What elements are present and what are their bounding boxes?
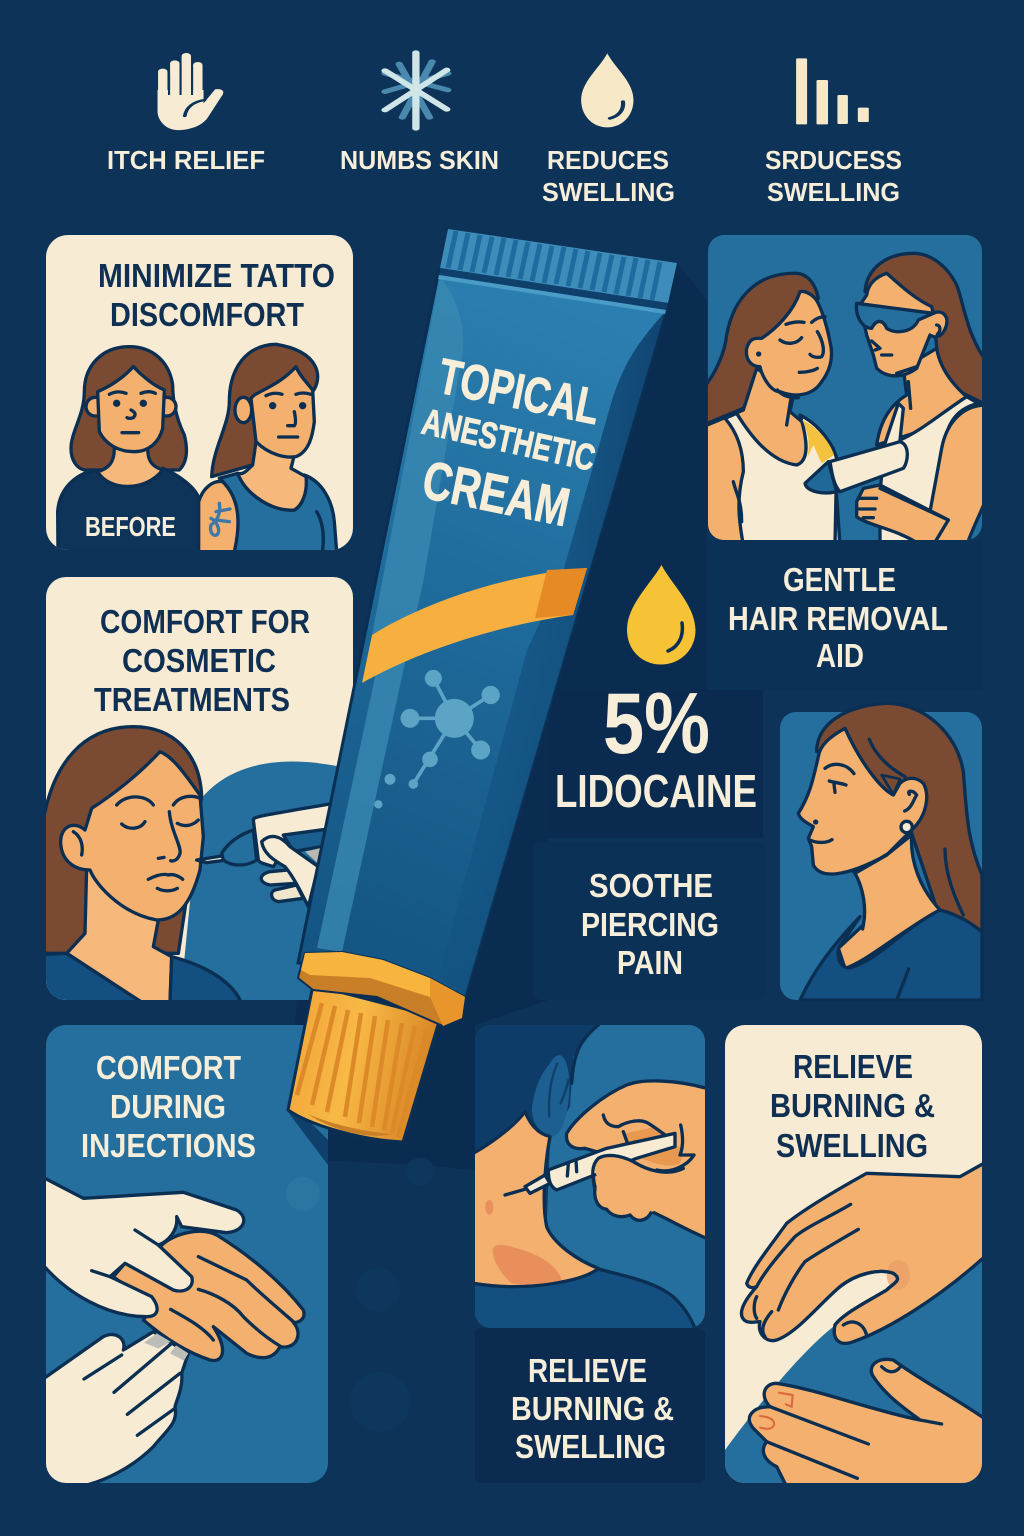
- illustration: client: [703, 273, 840, 545]
- heading: comfort during injections: [82, 1056, 255, 1158]
- text panel: relieve burning and swelling: [475, 1328, 705, 1483]
- heading: relieve burning and swelling: SWELLING: [776, 1127, 928, 1164]
- tube: topical anesthetic cream: [288, 229, 677, 1142]
- heading: comfort during injections: INJECTIONS: [81, 1127, 256, 1164]
- icon: hand: [158, 56, 223, 130]
- panel: profile woman for piercing: [780, 703, 982, 1000]
- illustration: hands: [42, 1177, 304, 1485]
- tube crimp: [438, 229, 677, 314]
- label: itch relief: ITCH RELIEF: [107, 145, 265, 175]
- text panel: relieve burning and swelling: SWELLING: [515, 1428, 666, 1465]
- heading: relieve burning and swelling: RELIEVE: [793, 1048, 913, 1085]
- heading: comfort for cosmetic treatments: COMFORT FOR: [100, 603, 310, 640]
- text panel: 5% lidocaine: [548, 676, 763, 838]
- text panel: gentle hair removal aid: HAIR REMOVAL: [728, 600, 948, 637]
- text panel: soothe piercing pain: PAIN: [617, 944, 683, 981]
- text panel: gentle hair removal aid: GENTLE: [783, 561, 896, 598]
- heading: relieve burning and swelling: BURNING &: [770, 1087, 935, 1124]
- illustration: syringe and hand: [470, 1023, 710, 1330]
- icon: snowflake: [385, 53, 448, 128]
- text panel: soothe piercing pain: PIERCING: [581, 906, 719, 943]
- injector device: [197, 856, 227, 863]
- orange cap: [288, 985, 440, 1142]
- text panel: relieve burning and swelling: BURNING &: [511, 1390, 674, 1427]
- tube shadow: [288, 263, 707, 1170]
- tube label: ANESTHETIC: [418, 401, 599, 479]
- label: srducess swelling: [765, 145, 902, 207]
- illustration: hands on arm: [725, 1162, 987, 1487]
- molecule icon: [374, 670, 500, 808]
- tube label: [418, 348, 605, 538]
- heading: minimize tattoo discomfort: [100, 264, 334, 326]
- heading: minimize tattoo discomfort: DISCOMFORT: [110, 296, 304, 333]
- label: reduces swelling: SWELLING: [542, 177, 675, 207]
- panel: relieve burning and swelling: [725, 1025, 987, 1487]
- text panel: 5% lidocaine: 5%: [603, 676, 710, 772]
- icon: water drop: [581, 53, 633, 127]
- illustration: woman before: [58, 347, 199, 552]
- icon: yellow drop: [627, 565, 696, 664]
- panel: comfort during injections: [42, 1025, 328, 1485]
- orange collar: [298, 952, 465, 1026]
- illustration: woman with tattoo: [199, 344, 337, 552]
- panel: minimize tattoo discomfort: [46, 235, 353, 552]
- heading: comfort for cosmetic treatments: COSMETIC: [122, 642, 276, 679]
- text panel: 5% lidocaine: LIDOCAINE: [555, 765, 757, 817]
- text panel: soothe piercing pain: SOOTHE: [589, 867, 713, 904]
- label: srducess swelling: SRDUCESS: [765, 145, 902, 175]
- heading: minimize tattoo discomfort: MINIMIZE TATTO: [98, 257, 335, 294]
- label: reduces swelling: REDUCES: [547, 145, 669, 175]
- label: srducess swelling: SWELLING: [767, 177, 900, 207]
- heading: comfort during injections: DURING: [110, 1088, 226, 1125]
- icon: bars: [796, 58, 869, 124]
- heading: comfort during injections: COMFORT: [96, 1049, 241, 1086]
- text panel: gentle hair removal aid: AID: [816, 637, 864, 674]
- tube label: CREAM: [418, 450, 575, 538]
- text panel: relieve burning and swelling: RELIEVE: [528, 1352, 647, 1389]
- label: before: BEFORE: [85, 511, 176, 542]
- text panel: gentle hair removal aid: [707, 540, 983, 690]
- panel: injection illustration: [470, 1023, 710, 1330]
- syringe: [505, 1188, 528, 1195]
- tube body: [298, 270, 668, 999]
- orange band: [362, 568, 587, 683]
- tube label: TOPICAL: [434, 348, 605, 435]
- label: reduces swelling: [542, 145, 675, 207]
- heading: relieve burning and swelling: [772, 1055, 934, 1158]
- faint decorative circles: [350, 1158, 434, 1432]
- illustration: woman receiving treatment: [43, 727, 340, 1003]
- laser device: [805, 462, 837, 493]
- panel: comfort for cosmetic treatments: [43, 577, 353, 1003]
- heading: comfort for cosmetic treatments: TREATMENTS: [94, 681, 290, 718]
- panel: laser hair removal illustration: [703, 235, 987, 545]
- text panel: soothe piercing pain: [533, 842, 765, 1000]
- illustration: woman profile: [798, 703, 982, 1000]
- heading: comfort for cosmetic treatments: [94, 610, 310, 712]
- illustration: technician with goggles: [805, 253, 987, 545]
- label: numbs skin: NUMBS SKIN: [340, 145, 499, 175]
